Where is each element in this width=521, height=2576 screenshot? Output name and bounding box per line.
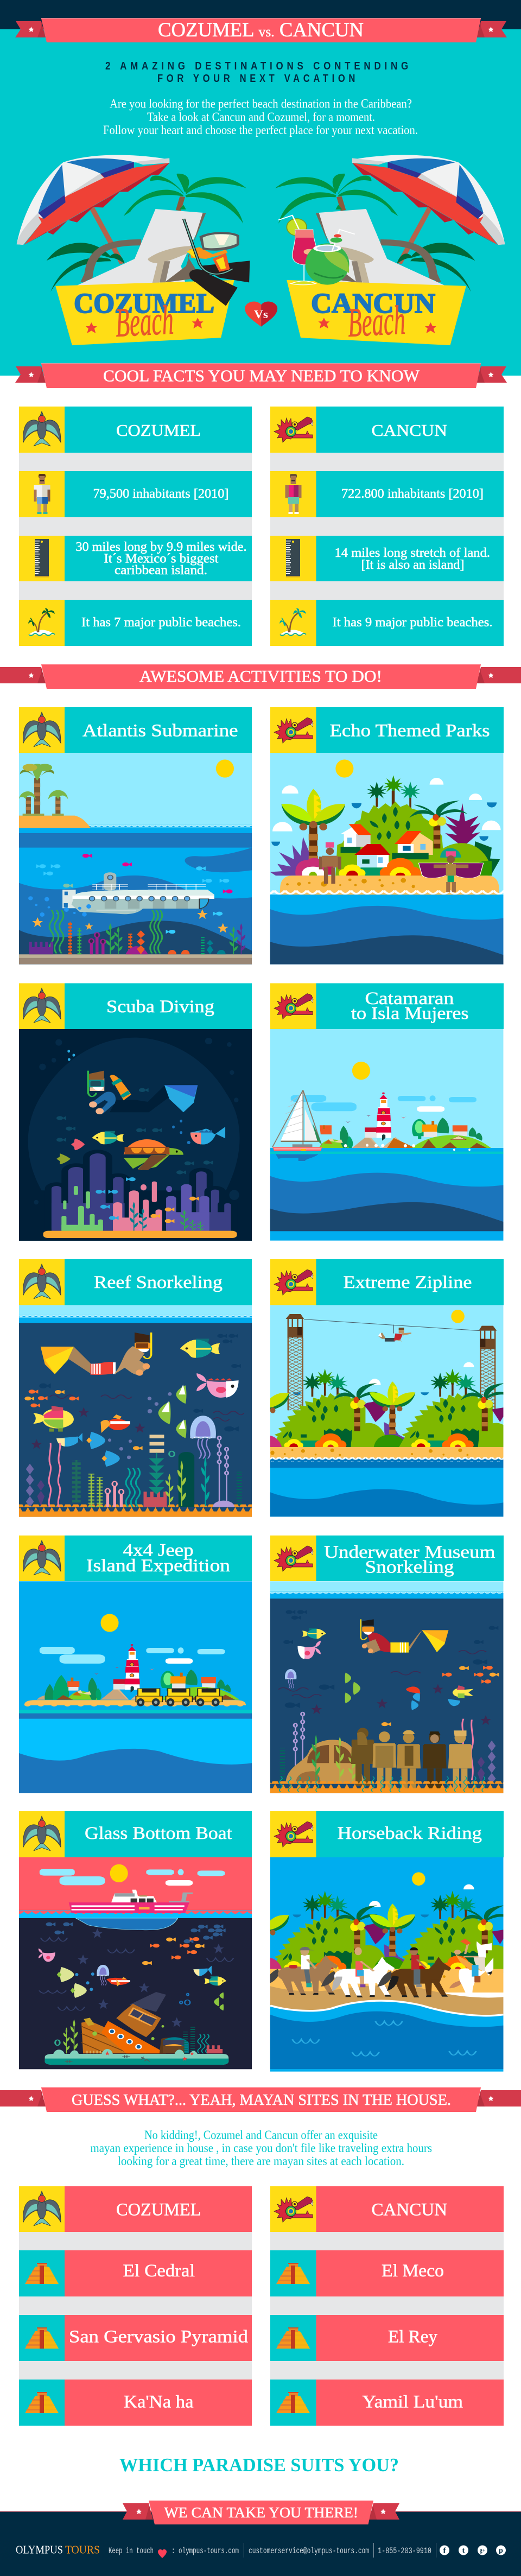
card: Scuba Diving <box>19 984 252 1241</box>
heading: Atlantis Submarine <box>82 721 238 740</box>
panel: Cozumel mayan sites <box>19 2186 252 2426</box>
card: Catamaran <box>270 984 504 1241</box>
row: inhabitants <box>270 471 504 517</box>
illustration: catamaran and lighthouse <box>270 1029 503 1241</box>
heading <box>86 1540 230 1576</box>
sign text: Cozumel: COZUMEL <box>74 288 214 319</box>
site: Yamil Lu'um: Yamil Lu'um <box>363 2393 463 2412</box>
wreck <box>81 1992 166 2053</box>
plum fern <box>445 803 480 845</box>
site: El Cedral: El Cedral <box>123 2261 195 2281</box>
mayan intro text <box>90 2128 432 2168</box>
row: beaches: It has 9 major public beaches. <box>332 616 493 630</box>
social icons: t <box>462 2547 465 2555</box>
heading: Echo Themed Parks <box>330 721 490 740</box>
heading: Cozumel: COZUMEL <box>116 2200 201 2220</box>
social icons <box>440 2546 506 2555</box>
icon: bird <box>23 2191 61 2226</box>
heading: Catamaran <box>365 989 454 1008</box>
houses <box>341 824 433 875</box>
row: inhabitants: 79,500 inhabitants [2010] <box>93 487 229 501</box>
sunken car <box>285 1740 365 1784</box>
site: San Gervasio Pyramid <box>19 2315 252 2361</box>
heading: Cancun: CANCUN <box>371 2200 447 2220</box>
banner: cool facts <box>15 364 507 388</box>
turtle <box>124 1139 183 1170</box>
banner: activities: AWESOME ACTIVITIES TO DO! <box>139 667 382 686</box>
icon: dragon <box>274 1546 313 1571</box>
footer contact: 1-855-203-9910 <box>378 2546 431 2556</box>
icon: bird <box>23 1264 61 1299</box>
footer contact <box>109 2543 436 2558</box>
right tower <box>479 1326 497 1411</box>
row: size: It´s Mexico´s biggest <box>104 551 219 566</box>
intro text: Follow your heart and choose the perfect place for your next vacation. <box>103 123 418 137</box>
purple fern <box>270 837 324 875</box>
heading <box>324 1543 495 1577</box>
intro text: Take a look at Cancun and Cozumel, for a moment. <box>147 110 375 124</box>
submarine hull <box>62 872 214 914</box>
icon: snorkel mask and fins <box>184 219 250 306</box>
illustration: jeep island <box>19 1581 252 1793</box>
sign script: Beach right: Beach <box>346 297 406 346</box>
intro text <box>103 97 418 137</box>
heading: Extreme Zipline <box>343 1273 472 1292</box>
footer band <box>0 2511 521 2576</box>
icon: dragon <box>274 2197 313 2222</box>
footer logo: OLYMPUS <box>16 2543 63 2556</box>
flowers <box>295 858 421 875</box>
title banner: COZUMEL vs. CANCUN <box>158 19 364 41</box>
row: inhabitants: 722.800 inhabitants [2010] <box>341 487 484 501</box>
row: beaches <box>270 600 504 646</box>
icon: bird <box>23 712 61 747</box>
icon: bird <box>23 411 61 446</box>
left tower <box>285 1314 304 1410</box>
site: Ka'Na ha <box>19 2380 252 2426</box>
heading: Underwater Museum <box>324 1543 495 1562</box>
icon: dragon <box>274 993 313 1019</box>
sign text: Cancun: CANCUN <box>311 288 435 319</box>
sign: Cozumel <box>55 280 234 345</box>
call to action banner <box>123 2501 399 2524</box>
site: El Rey <box>270 2315 504 2361</box>
icon: bird <box>23 1816 61 1851</box>
panel: Cozumel facts <box>19 407 252 646</box>
footer contact: customerservice@olympus-tours.com <box>249 2546 369 2556</box>
row: size: 30 miles long by 9.9 miles wide. <box>76 540 246 554</box>
right palm <box>409 801 467 848</box>
banner: mayan sites: GUESS WHAT?... YEAH, MAYAN SITES IN THE HOUSE. <box>72 2092 451 2109</box>
mayan intro text: mayan experience in house , in case you don't file like traveling extra hours <box>90 2141 432 2155</box>
wing dancer <box>418 848 484 892</box>
heading: Snorkeling <box>365 1558 454 1577</box>
card: Atlantis Submarine <box>19 707 252 965</box>
treasure chest <box>160 2037 189 2053</box>
heading: Scuba Diving <box>106 997 214 1017</box>
heading: Cancun: CANCUN <box>371 421 447 440</box>
title banner <box>15 18 507 42</box>
card: Echo Themed Parks <box>270 707 504 965</box>
illustration: glass bottom boat and wreck <box>19 1857 252 2069</box>
card: Reef Snorkeling <box>19 1259 252 1517</box>
site: El Rey: El Rey <box>388 2327 438 2347</box>
scene: Cozumel beach chair and umbrella <box>17 155 246 292</box>
row: beaches: It has 7 major public beaches. <box>81 616 241 630</box>
illustration: zipline <box>270 1305 514 1517</box>
banner: cool facts: COOL FACTS YOU MAY NEED TO KNOW <box>103 366 420 385</box>
seabed <box>45 2049 228 2065</box>
call to action banner: WE CAN TAKE YOU THERE! <box>164 2504 358 2521</box>
icon: dragon <box>274 718 313 743</box>
snorkeler <box>41 1333 151 1376</box>
statues <box>351 1728 472 1790</box>
social icons: p <box>499 2547 503 2555</box>
heading: Horseback Riding <box>338 1824 482 1843</box>
footer contact: Keep in touch <box>109 2546 154 2556</box>
site: El Meco <box>270 2250 504 2296</box>
icon: bird <box>23 1540 61 1575</box>
heading: Island Expedition <box>86 1556 230 1576</box>
row: size <box>270 536 504 581</box>
footer contact: : olympus-tours.com <box>171 2546 239 2556</box>
social icons: f <box>443 2547 446 2555</box>
icon: dragon <box>274 1822 313 1847</box>
icon: versus heart <box>245 302 277 327</box>
hero illustration <box>17 155 505 345</box>
card: Horseback Riding <box>264 1811 514 2072</box>
illustration: scuba diver <box>19 1029 252 1241</box>
subtitle: FOR YOUR NEXT VACATION <box>157 73 359 85</box>
boat <box>69 1890 193 1930</box>
top navy band <box>0 0 521 29</box>
man in mayan outfit <box>319 842 341 884</box>
card: Underwater Museum <box>270 1536 504 1793</box>
sign: Cancun <box>287 280 466 345</box>
riders and horses <box>264 1939 493 1997</box>
versus label: Vs <box>254 308 268 321</box>
sign script: Beach left: Beach <box>114 297 175 346</box>
site: El Meco: El Meco <box>382 2261 444 2281</box>
heading: to Isla Mujeres <box>351 1004 469 1024</box>
teal hero background <box>0 29 521 376</box>
coral <box>52 1153 231 1231</box>
site: Yamil Lu'um <box>270 2380 504 2426</box>
illustration: submarine <box>19 753 252 965</box>
heading: 4x4 Jeep <box>123 1540 193 1560</box>
heading: Glass Bottom Boat <box>85 1824 232 1843</box>
icon: dragon <box>274 1270 313 1295</box>
row: size: [It is also an island] <box>361 558 465 572</box>
illustration: underwater museum <box>270 1581 503 1793</box>
social icons: g+ <box>480 2548 486 2554</box>
site: Ka'Na ha: Ka'Na ha <box>124 2393 194 2412</box>
subtitle <box>105 60 412 85</box>
sailboat <box>272 1090 332 1161</box>
closing question: WHICH PARADISE SUITS YOU? <box>119 2454 399 2476</box>
mayan intro text: looking for a great time, there are mayan sites at each location. <box>118 2154 404 2168</box>
snorkeler <box>361 1619 448 1654</box>
site: San Gervasio Pyramid: San Gervasio Pyramid <box>69 2327 249 2347</box>
banner: activities <box>0 664 521 689</box>
row: size: caribbean island. <box>115 563 207 578</box>
heading: Cozumel: COZUMEL <box>116 421 201 440</box>
intro text: Are you looking for the perfect beach destination in the Caribbean? <box>110 97 412 111</box>
subtitle: 2 AMAZING DESTINATIONS CONTENDING <box>105 60 412 72</box>
illustration: horseback riding <box>264 1857 514 2072</box>
mayan intro text: No kidding!, Cozumel and Cancun offer an exquisite <box>144 2128 378 2142</box>
heading: Reef Snorkeling <box>94 1273 223 1292</box>
footer logo <box>16 2543 100 2556</box>
zipliner <box>378 1325 411 1342</box>
illustration: tropical park island <box>270 753 503 965</box>
footer logo: TOURS <box>65 2543 100 2556</box>
row: size: 14 miles long stretch of land. <box>334 546 490 560</box>
banner: mayan sites <box>0 2088 521 2112</box>
card: Glass Bottom Boat <box>19 1811 252 2069</box>
card: Extreme Zipline <box>270 1259 514 1517</box>
site: El Cedral <box>19 2250 252 2296</box>
scene: Cancun beach chair and umbrella <box>275 155 505 292</box>
stars <box>86 318 436 333</box>
row: beaches <box>19 600 252 646</box>
card: 4x4 Jeep <box>19 1536 252 1793</box>
heading <box>351 989 469 1024</box>
illustration: reef snorkeler <box>19 1305 252 1517</box>
icon: bird <box>23 988 61 1023</box>
diver <box>87 1071 198 1114</box>
row: inhabitants <box>19 471 252 517</box>
icon: cocktail and coconut <box>278 215 355 285</box>
panel: Cancun mayan sites <box>270 2186 504 2426</box>
row: size <box>19 536 252 581</box>
panel: Cancun facts <box>270 407 504 646</box>
icon: dragon <box>274 417 313 442</box>
